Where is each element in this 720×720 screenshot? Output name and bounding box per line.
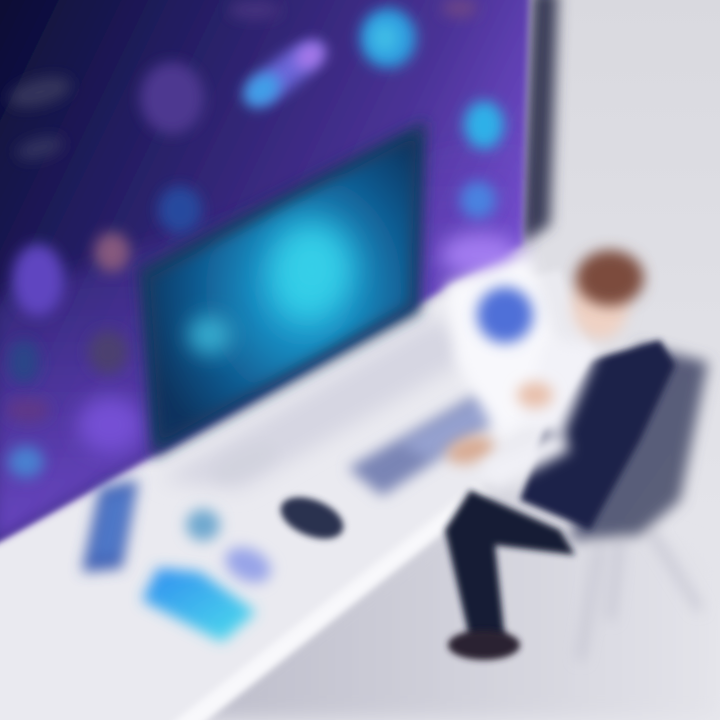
legs — [445, 490, 575, 640]
tablet on desk — [142, 568, 256, 642]
desk surface — [0, 270, 620, 720]
monitor stand — [209, 437, 281, 487]
person — [443, 250, 675, 660]
arm and hand — [517, 382, 553, 408]
monitor — [138, 120, 426, 458]
mouse — [275, 489, 349, 547]
paper and tablet held by person — [445, 255, 570, 440]
white shirt — [520, 340, 600, 440]
phone on desk — [82, 480, 138, 572]
small desk objects — [186, 509, 277, 590]
large digital display wall — [0, 0, 558, 548]
shoe — [448, 630, 520, 660]
chair — [570, 345, 708, 660]
head — [572, 271, 628, 339]
keyboard — [348, 392, 516, 496]
hair — [576, 250, 644, 306]
torso — [520, 340, 675, 530]
display icons: blurred floating elements — [6, 0, 520, 478]
